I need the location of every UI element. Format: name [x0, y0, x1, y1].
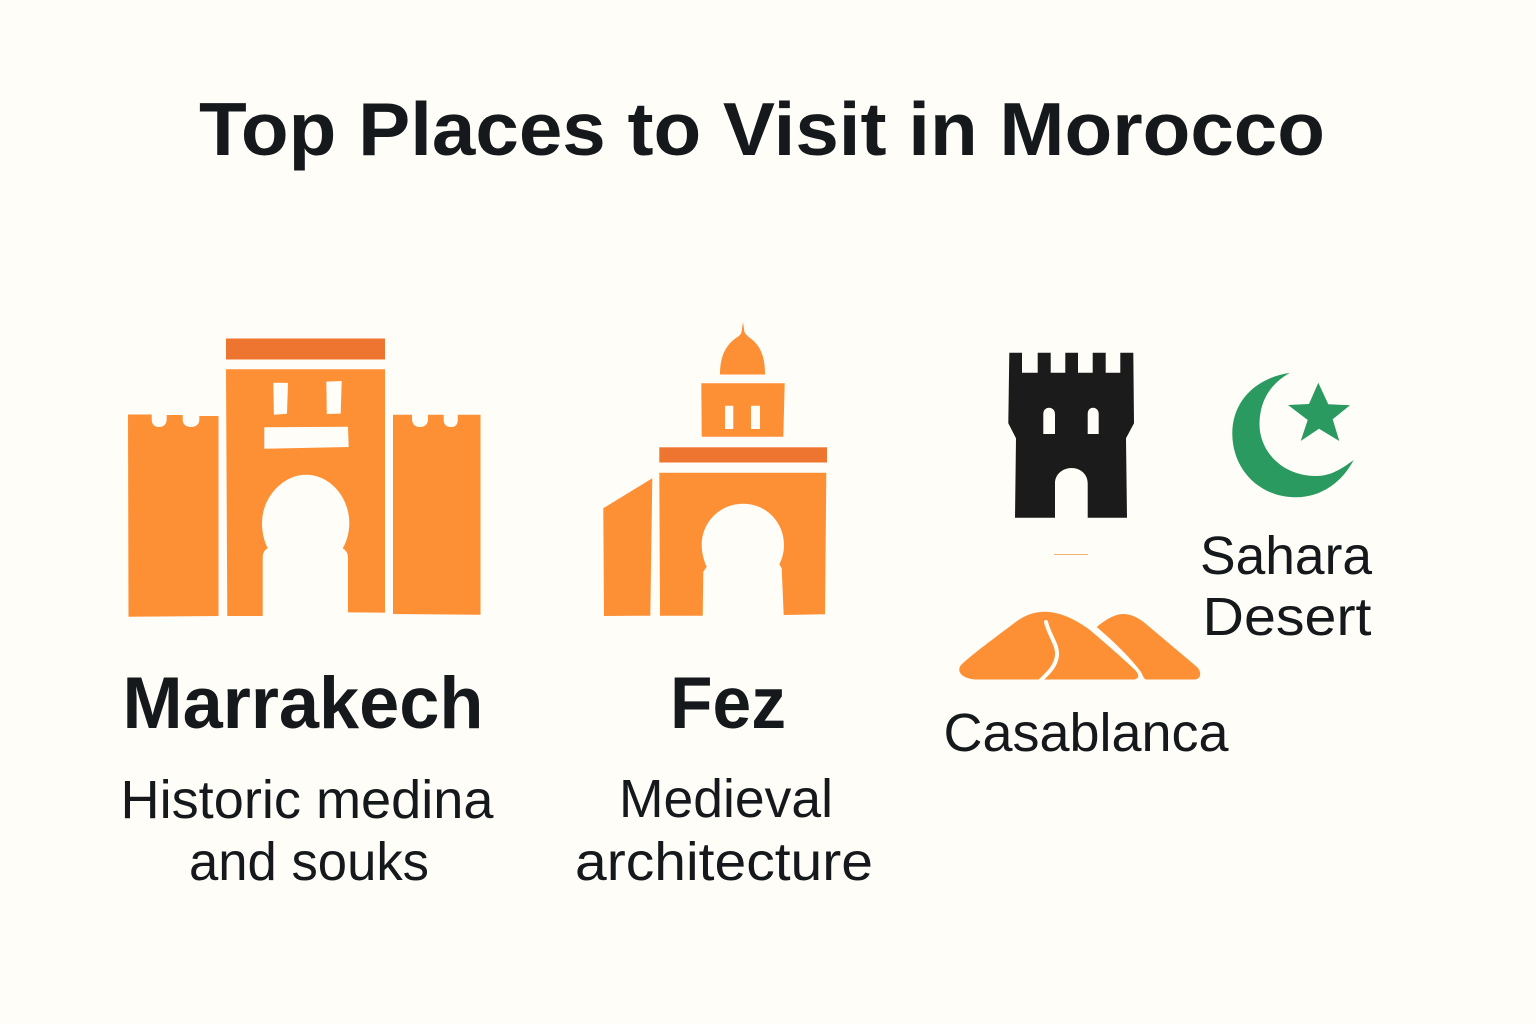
heading: Fez: Fez	[670, 663, 786, 744]
panel: Casablanca	[944, 353, 1229, 763]
text: Sahara Desert: Desert	[1202, 587, 1372, 647]
icon: Fez gate	[603, 322, 827, 616]
text: Marrakech description	[120, 770, 494, 892]
text: Fez description	[575, 769, 873, 892]
icon: green crescent and star	[1232, 373, 1354, 497]
text: Fez description: Medieval	[619, 769, 833, 829]
icon: Marrakech gate	[128, 338, 480, 617]
panel: Sahara Desert	[1200, 373, 1373, 647]
icon: dunes	[959, 554, 1200, 681]
text: Marrakech description: Historic medina	[120, 770, 494, 830]
text: Sahara Desert	[1200, 526, 1373, 647]
text: Marrakech description: and souks	[189, 832, 429, 892]
text: Casablanca: Casablanca	[944, 703, 1229, 763]
panel: Marrakech	[120, 338, 494, 892]
icon: black fortress tower	[1008, 353, 1134, 518]
text: Sahara Desert: Sahara	[1200, 526, 1373, 586]
panel: Fez	[575, 322, 873, 892]
text: Fez description: architecture	[575, 832, 873, 892]
heading: Marrakech: Marrakech	[122, 663, 484, 744]
title: Top Places to Visit in Morocco	[199, 87, 1325, 171]
